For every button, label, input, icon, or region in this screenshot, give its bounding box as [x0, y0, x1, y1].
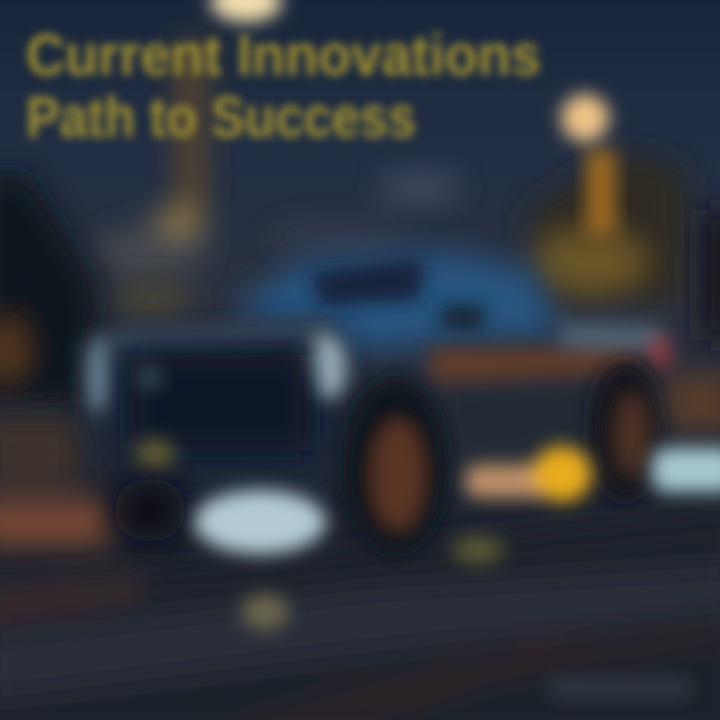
- left ground: [0, 285, 185, 545]
- truck: side body: [430, 322, 672, 460]
- lamp glow: [561, 94, 609, 142]
- truck: white rear light: [652, 448, 720, 492]
- street lamp post left: [95, 40, 205, 276]
- right lamp post: [586, 150, 616, 235]
- far right dark edge: [700, 210, 720, 340]
- right ground: [665, 375, 720, 430]
- truck: front wheel: [343, 377, 447, 553]
- truck: grille edge highlights: [87, 322, 346, 415]
- distant haze: [270, 176, 462, 252]
- truck: windshield: [310, 258, 485, 330]
- right tree and lamp: [525, 150, 690, 305]
- truck: rear wheel: [589, 360, 661, 500]
- moon: [210, 0, 282, 22]
- title: [26, 23, 541, 150]
- title: Current Innovations: [26, 23, 541, 88]
- truck: front left wheel shadow: [114, 478, 186, 542]
- truck: grille: [130, 355, 310, 450]
- truck: [85, 250, 720, 554]
- left trees: [0, 175, 100, 405]
- truck: front body: [85, 320, 350, 500]
- truck: white headlight reflection: [194, 490, 326, 554]
- road markings: [241, 536, 690, 696]
- title: Path to Success: [26, 85, 416, 150]
- truck: yellow side light: [465, 446, 592, 502]
- truck: cabin roof: [240, 250, 565, 350]
- road: [0, 510, 720, 720]
- truck: grille details: [135, 368, 175, 471]
